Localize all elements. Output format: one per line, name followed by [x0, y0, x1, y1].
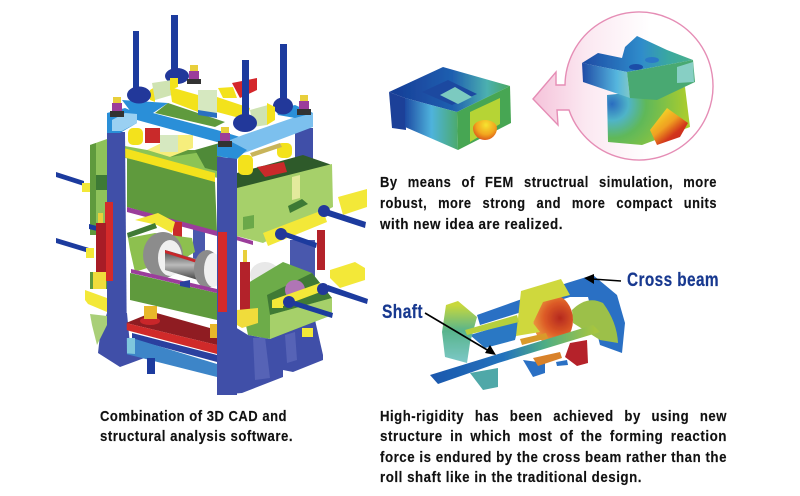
arrow: shaft pointer [425, 313, 496, 355]
FEM unit: enlarged part [582, 36, 695, 145]
lower blue plate [122, 333, 217, 377]
mechanisms under top frame [128, 128, 292, 177]
lower teal part [470, 368, 498, 390]
lower right green block [240, 262, 368, 339]
left rear parts [85, 139, 107, 345]
text block: CAD caption: Combination of 3D CAD and [100, 408, 287, 425]
front screw rod [233, 60, 257, 132]
green semi disc [572, 300, 618, 343]
main indigo columns [107, 132, 237, 395]
text block: CAD caption [100, 408, 293, 445]
lower left green block [130, 269, 217, 320]
text block: FEM description: By means of FEM structrual simulation, more [380, 174, 717, 191]
text block: high rigidity description: force is endured by the cross beam rather than the [380, 449, 727, 466]
upper yellow tie bar [120, 147, 215, 182]
panel: cross beam and shaft section [430, 275, 625, 390]
yellow housing [516, 279, 570, 336]
text block: high rigidity description: structure in which most of the forming reaction [380, 428, 727, 445]
left rods [56, 172, 97, 258]
screw rods and nuts on frame [127, 31, 293, 114]
text block: high rigidity description [380, 408, 727, 486]
pink magnifier circle with arrow [533, 12, 713, 160]
upper arm [465, 315, 519, 335]
panel: 3D CAD roll stand model [56, 15, 368, 395]
lower rolls [127, 213, 280, 288]
top blue frame [107, 100, 313, 159]
upper right bar and rods [263, 189, 367, 248]
shaft [430, 325, 600, 384]
front gearbox [250, 103, 275, 127]
text block: FEM description: with new idea are realized. [379, 216, 563, 233]
cross beam [477, 275, 625, 353]
dark red bearing [565, 340, 588, 366]
top gearbox assembly [150, 78, 257, 127]
blue web behind arm [470, 320, 520, 348]
rear screw rod B and nut [165, 15, 189, 84]
bolts [520, 333, 548, 345]
text block: high rigidity description: roll shaft like in the traditional design. [380, 469, 642, 486]
label: cross beam: Cross beam [627, 270, 719, 291]
arrow: cross beam pointer [584, 274, 621, 284]
red hydraulic cylinders [93, 202, 325, 328]
hot orange dome [533, 295, 573, 345]
upper green housing [125, 138, 333, 245]
rear red cylinder [173, 222, 182, 240]
panel: FEM simulation results [389, 12, 713, 160]
bolts lower [533, 352, 562, 366]
spring stacks [110, 65, 311, 147]
text block: FEM description [379, 174, 717, 233]
text block: FEM description: robust, more strong and more compact units [380, 195, 717, 212]
base frame [98, 313, 323, 395]
FEM unit: complete part [389, 67, 511, 150]
lower red plate [126, 306, 217, 354]
rear columns [193, 128, 315, 280]
text block: high rigidity description: High-rigidity has been achieved by using new [380, 408, 727, 425]
rear feet [523, 360, 568, 377]
left housing block [442, 301, 477, 363]
label: shaft: Shaft [382, 302, 423, 323]
text block: CAD caption: structural analysis software. [100, 428, 293, 445]
